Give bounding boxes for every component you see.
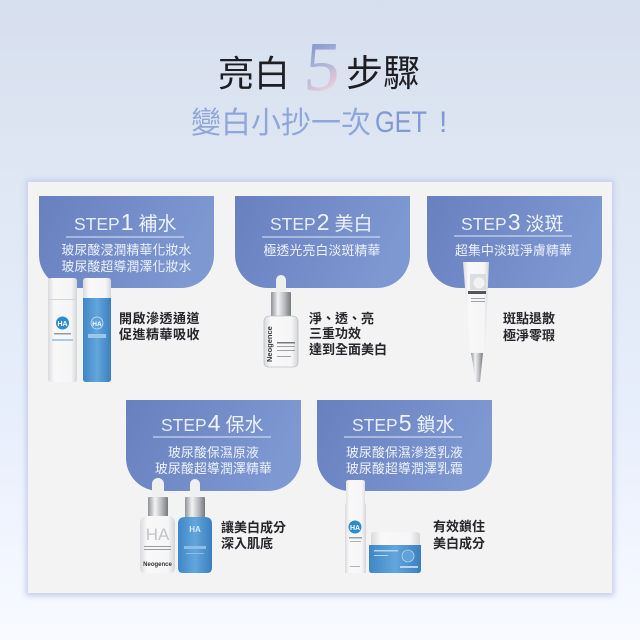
icon: step 4 serum bottles: Neogence xyxy=(143,562,172,568)
step 5 benefit text xyxy=(433,516,485,552)
step 1 products text: 玻尿酸浸潤精華化妝水 xyxy=(62,240,191,258)
step 3 benefit text: 斑點退散 xyxy=(503,308,555,327)
step 1 benefit text xyxy=(119,308,200,343)
step 3 benefit text xyxy=(503,308,555,344)
icon: step 1 toner bottles xyxy=(48,278,111,382)
step 2 tab xyxy=(235,196,410,288)
icon: step 2 serum dropper: Neogence xyxy=(265,326,274,362)
step 5 benefit text: 有效鎖住 xyxy=(433,516,485,535)
subtitle: 變白小抄一次 xyxy=(191,98,371,142)
step 4 benefit text xyxy=(221,517,286,552)
title: 亮白 xyxy=(218,45,290,97)
step 2 benefit text: 三重功效 xyxy=(309,323,361,342)
step 1 tab xyxy=(39,196,214,288)
title xyxy=(218,29,420,106)
icon: step 5 pump bottle and cream jar: HA xyxy=(350,525,360,532)
step 4 benefit text: 讓美白成分 xyxy=(221,517,286,536)
title: 步驟 xyxy=(346,43,420,97)
panel: step 2 xyxy=(235,196,410,367)
icon: step 5 pump bottle and cream jar xyxy=(345,480,421,573)
step 2 heading: STEP2 美白 xyxy=(270,209,373,236)
icon: step 3 spot cream tube xyxy=(463,262,489,382)
main panel xyxy=(26,180,614,596)
icon: step 1 toner bottles: HA xyxy=(92,321,102,328)
panel: step 4 xyxy=(126,400,301,573)
numeral 5: 5 xyxy=(302,29,343,106)
step 5 benefit text: 美白成分 xyxy=(433,533,485,552)
step 4 products text: 玻尿酸保濕原液 xyxy=(168,442,259,461)
panel: step 5: 玻尿酸超導潤澤乳霜 xyxy=(346,458,463,477)
panel: step 5 xyxy=(317,400,492,573)
subtitle: ! xyxy=(439,106,447,139)
panel: step 1: 玻尿酸超導潤澤化妝水 xyxy=(62,256,191,275)
icon: step 4 serum bottles: HA xyxy=(189,525,201,534)
step 4 tab xyxy=(126,400,301,491)
step 2 benefit text xyxy=(309,308,387,358)
icon: step 2 serum dropper xyxy=(264,275,298,367)
subtitle: GET xyxy=(375,106,427,139)
step 2 benefit text: 達到全面美白 xyxy=(309,339,387,358)
step 1 benefit text: 促進精華吸收 xyxy=(119,324,200,343)
step 2 benefit text: 淨、透、亮 xyxy=(309,308,374,327)
icon: step 4 serum bottles: HA xyxy=(146,525,170,544)
step 3 tab xyxy=(427,196,602,288)
step 4 benefit text: 深入肌底 xyxy=(221,533,273,552)
step 2 products text: 極透光亮白淡斑精華 xyxy=(264,240,380,259)
icon: step 4 serum bottles xyxy=(140,478,212,573)
panel: step 1 xyxy=(39,196,214,382)
panel: step 3 xyxy=(427,196,602,382)
step 3 heading: STEP3 淡斑 xyxy=(461,209,564,236)
step 3 benefit text: 極淨零瑕 xyxy=(503,325,555,344)
panel: step 4: 玻尿酸超導潤澤精華 xyxy=(155,458,272,477)
step 5 tab xyxy=(317,400,492,491)
icon: step 1 toner bottles: HA xyxy=(57,321,68,328)
step 4 heading: STEP4 保水 xyxy=(161,410,264,437)
step 5 heading: STEP5 鎖水 xyxy=(352,410,455,437)
step 1 benefit text: 開啟滲透通道 xyxy=(119,308,200,327)
step 1 heading: STEP1 補水 xyxy=(74,209,177,236)
step 3 products text: 超集中淡斑淨膚精華 xyxy=(455,240,572,259)
step 5 products text: 玻尿酸保濕滲透乳液 xyxy=(346,442,463,461)
